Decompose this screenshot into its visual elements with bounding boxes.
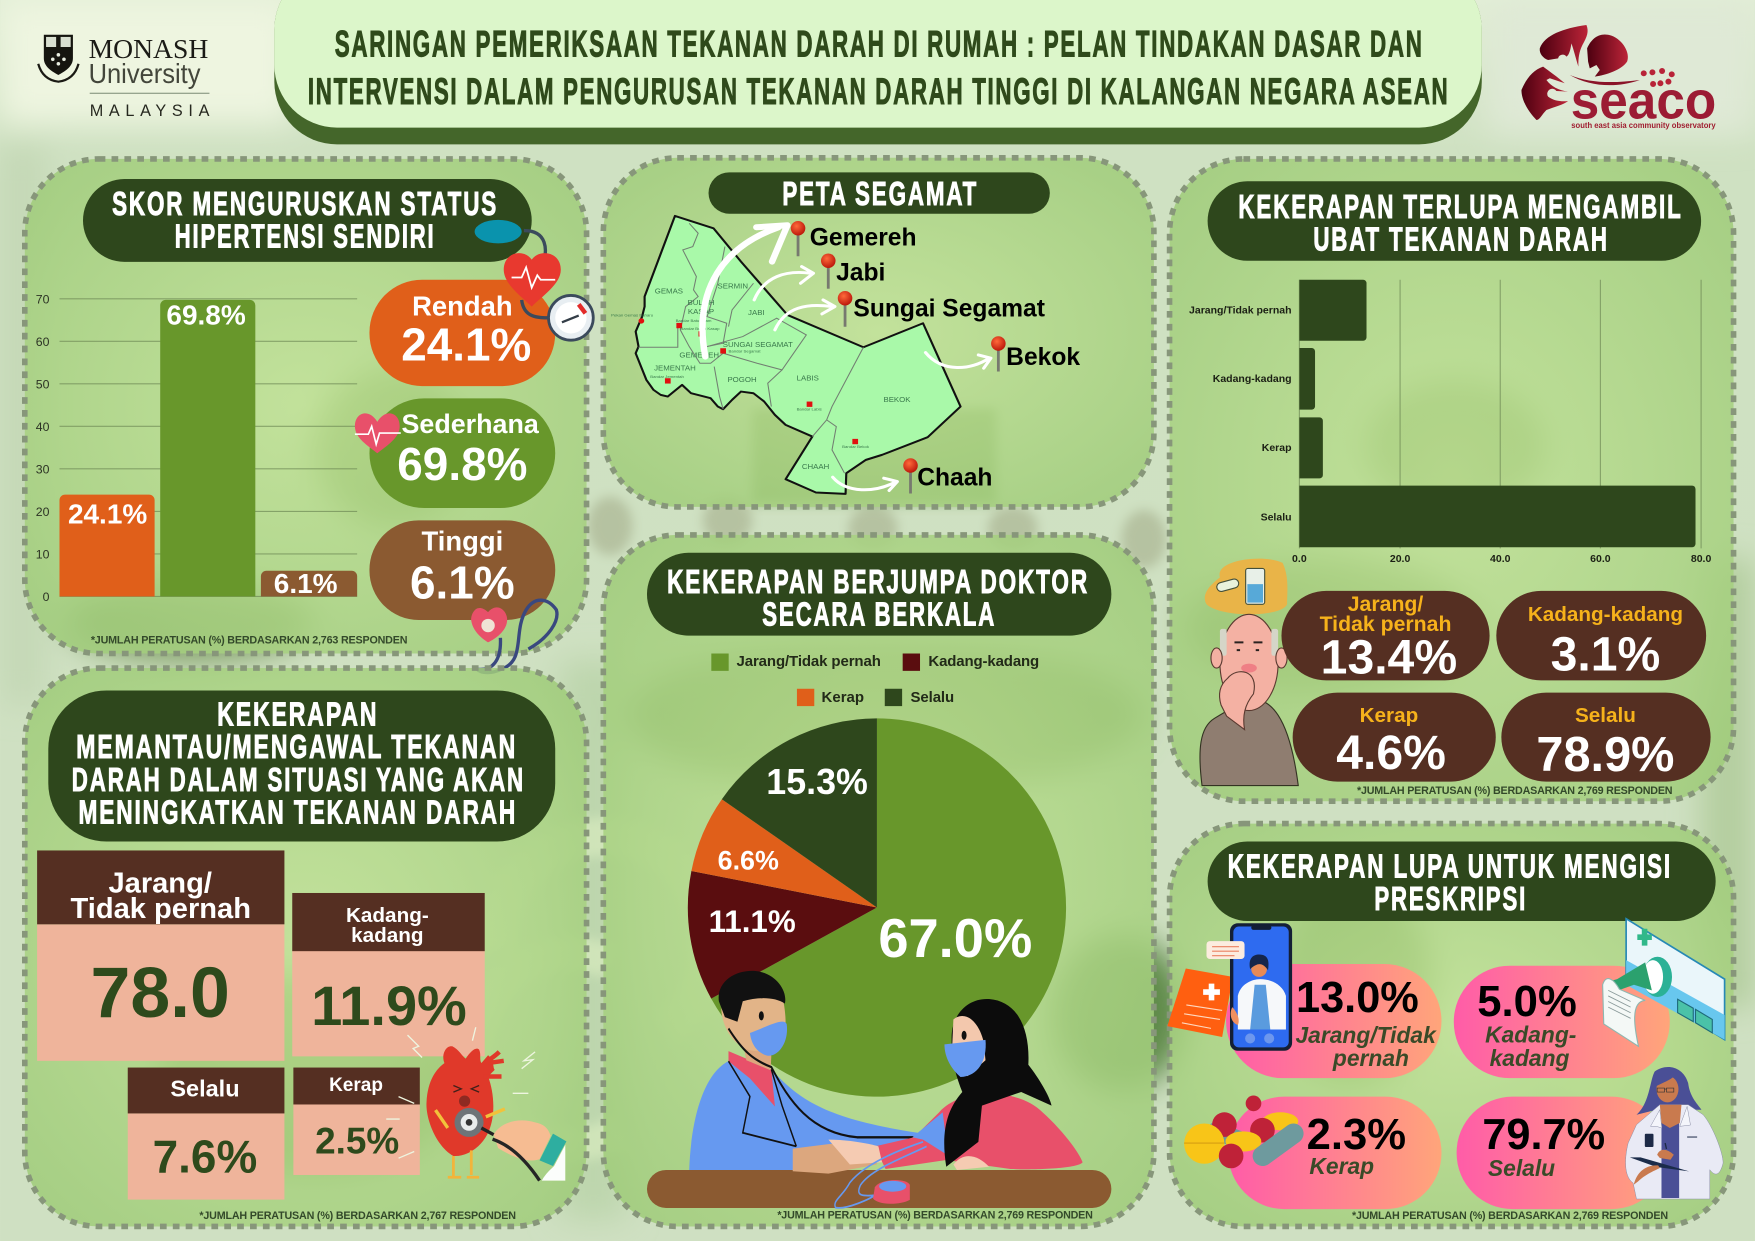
bar chart: forgetting medicine: Kadang-kadang xyxy=(1213,373,1292,385)
stat: rendah: 24.1% xyxy=(401,318,531,370)
icon: prescription sheet xyxy=(1167,969,1233,1037)
bar chart: forgetting medicine: 0.0 xyxy=(1292,553,1307,565)
map of segamat: JEMENTAH xyxy=(654,364,696,372)
map of segamat: CHAAH xyxy=(802,462,829,471)
illustration: doctor and patient xyxy=(689,971,1083,1208)
stat: selalu xyxy=(1457,1097,1668,1209)
map of segamat xyxy=(611,216,961,494)
pin: gemereh xyxy=(791,221,917,256)
stat: jarang/tidak pernah: Jarang/ xyxy=(1348,592,1423,616)
bar chart: forgetting medicine xyxy=(1189,280,1711,565)
stat: kadang-kadang: kadang xyxy=(1490,1045,1570,1071)
pin: jabi xyxy=(821,253,885,289)
seaco logo xyxy=(1521,25,1716,130)
arrows from map to pins xyxy=(703,225,991,491)
icon: prescription machine xyxy=(1603,919,1725,1046)
stat: jarang / tidak pernah: Tidak pernah xyxy=(71,893,251,925)
stat: selalu: 79.7% xyxy=(1482,1111,1605,1159)
stat: sederhana xyxy=(369,398,555,508)
monash university malaysia logo: MONASH xyxy=(89,34,208,65)
bar chart: forgetting medicine: 80.0 xyxy=(1691,553,1711,565)
heading: KEKERAPAN BERJUMPA DOKTOR xyxy=(667,564,1089,601)
heading xyxy=(1208,181,1701,261)
footnote: *JUMLAH PERATUSAN (%) BERDASARKAN 2,767 RESPONDEN xyxy=(199,1210,516,1222)
pie chart: 11.1% xyxy=(709,904,796,939)
stat: selalu xyxy=(1501,693,1711,782)
heading: SECARA BERKALA xyxy=(762,597,996,634)
stat: kerap xyxy=(1228,1097,1441,1209)
panel: peta segamat xyxy=(603,158,1154,507)
map of segamat: JABI xyxy=(748,308,765,317)
map of segamat: LABIS xyxy=(797,374,819,382)
stat: tinggi: 6.1% xyxy=(410,557,515,609)
pin: bekok: Bekok xyxy=(1006,344,1080,371)
pin: gemereh: Gemereh xyxy=(810,225,917,252)
stat: kerap: Kerap xyxy=(329,1075,383,1096)
bar chart: status scores xyxy=(36,292,357,604)
pin: sungai segamat: Sungai Segamat xyxy=(853,296,1045,323)
illustration: forgetful man xyxy=(1200,559,1298,786)
bar chart: status scores: 70 xyxy=(36,292,50,306)
legend: Kerap xyxy=(822,689,864,706)
heading: UBAT TEKANAN DARAH xyxy=(1313,222,1609,259)
heading: MENINGKATKAN TEKANAN DARAH xyxy=(79,795,517,832)
map of segamat: SUNGAI SEGAMAT xyxy=(723,340,793,349)
map of segamat: SERMIN xyxy=(718,282,748,291)
stat: jarang / tidak pernah xyxy=(37,850,284,1061)
seaco logo: seaco xyxy=(1571,71,1716,130)
heading: DARAH DALAM SITUASI YANG AKAN xyxy=(72,762,525,799)
heading: KEKERAPAN xyxy=(217,697,378,734)
bar chart: forgetting medicine: Jarang/Tidak pernah xyxy=(1189,304,1292,316)
panel: kekerapan terlupa mengambil ubat xyxy=(1170,159,1734,801)
footnote: *JUMLAH PERATUSAN (%) BERDASARKAN 2,763 RESPONDEN xyxy=(91,634,408,646)
thought bubble xyxy=(1205,559,1287,614)
stat: kadang-kadang xyxy=(1454,966,1670,1078)
pin: sungai segamat xyxy=(838,291,1045,327)
stat: jarang/tidak pernah xyxy=(1226,964,1441,1078)
table xyxy=(647,1170,1111,1208)
stat: kerap: 2.5% xyxy=(315,1121,399,1162)
bar chart: status scores: 24.1% xyxy=(68,499,147,530)
stat: kadang-kadang: 11.9% xyxy=(311,974,467,1037)
stat: selalu: 78.9% xyxy=(1536,728,1674,782)
pie chart xyxy=(688,718,1066,1097)
stat: selalu: 7.6% xyxy=(153,1131,257,1183)
map of segamat: Bandar Buloh Kasap xyxy=(680,326,720,331)
stat: jarang/tidak pernah: Tidak pernah xyxy=(1320,612,1451,636)
icon: pharmacist xyxy=(1626,1067,1723,1199)
stat: jarang / tidak pernah: Jarang/ xyxy=(108,867,212,899)
stat: kerap: Kerap xyxy=(1360,704,1418,727)
stat: selalu: Selalu xyxy=(1488,1155,1555,1181)
icon: sederhana heart xyxy=(355,413,401,453)
bar chart: status scores: 30 xyxy=(36,462,50,476)
seaco logo: south east asia community observatory xyxy=(1571,121,1716,130)
map of segamat: GEMEREH xyxy=(679,351,719,359)
pie chart: 15.3% xyxy=(766,762,868,802)
bar chart: status scores: 20 xyxy=(36,505,50,519)
map of segamat: Bandar Bekok xyxy=(842,444,870,449)
heading xyxy=(83,179,532,262)
legend: Selalu xyxy=(911,689,954,706)
map of segamat: BULOH xyxy=(688,298,714,307)
map of segamat: KASAP xyxy=(688,307,714,316)
stat: jarang/tidak pernah xyxy=(1281,591,1490,685)
legend: Kadang-kadang xyxy=(928,653,1039,670)
icon: seaco flower xyxy=(1521,25,1675,120)
panel: kekerapan lupa mengisi preskripsi xyxy=(1167,824,1734,1226)
stat: kadang-kadang: 3.1% xyxy=(1551,627,1660,681)
stat: kerap xyxy=(293,1068,420,1175)
heading: MEMANTAU/MENGAWAL TEKANAN xyxy=(76,729,517,766)
bar chart: status scores: 69.8% xyxy=(166,300,246,331)
heading: HIPERTENSI SENDIRI xyxy=(175,218,435,255)
stat: kerap xyxy=(1293,693,1496,782)
panel: kekerapan memantau xyxy=(25,668,587,1226)
icon: heart with stethoscope xyxy=(386,1027,566,1181)
stat: kerap: 2.3% xyxy=(1307,1110,1406,1159)
map of segamat: Pekan Gemas Baharu xyxy=(611,313,654,318)
map of segamat: BEKOK xyxy=(883,395,910,404)
doctor xyxy=(689,971,923,1174)
stat: selalu xyxy=(128,1068,284,1200)
map of segamat: Bandar Labis xyxy=(797,407,822,412)
map of segamat: Bandar Batu Anam xyxy=(676,318,712,323)
bar chart: forgetting medicine: Selalu xyxy=(1261,511,1292,523)
stat: kadang-kadang: Kadang-kadang xyxy=(1528,603,1683,626)
pin: bekok xyxy=(991,336,1080,372)
stat: kadang-kadang xyxy=(292,893,485,1056)
monash university malaysia logo xyxy=(38,34,210,120)
bar chart: status scores: 60 xyxy=(36,335,50,349)
stat: tinggi: Tinggi xyxy=(421,526,503,557)
icon: monash crest xyxy=(38,35,79,82)
patient xyxy=(828,999,1083,1170)
stat: jarang/tidak pernah: Jarang/Tidak xyxy=(1295,1022,1437,1048)
bar chart: forgetting medicine: 60.0 xyxy=(1590,553,1611,565)
stat: kadang-kadang xyxy=(1496,591,1706,681)
stat: kadang-kadang: kadang xyxy=(351,924,424,947)
stat: selalu: Selalu xyxy=(1575,704,1636,727)
legend: Jarang/Tidak pernah xyxy=(737,653,881,670)
stat: kadang-kadang: Kadang- xyxy=(346,904,429,927)
legend xyxy=(711,653,1039,706)
bar chart: forgetting medicine: Kerap xyxy=(1262,442,1292,454)
stat: kerap: Kerap xyxy=(1309,1153,1374,1179)
bar chart: forgetting medicine: 20.0 xyxy=(1390,553,1410,565)
stat: rendah: Rendah xyxy=(412,291,513,322)
bar chart: status scores: 10 xyxy=(36,547,50,561)
bar chart: status scores: 50 xyxy=(36,377,50,391)
stat: jarang/tidak pernah: 13.0% xyxy=(1296,974,1419,1022)
monash university malaysia logo: University xyxy=(89,58,200,89)
map of segamat: GEMAS xyxy=(655,287,683,296)
heading: SKOR MENGURUSKAN STATUS xyxy=(112,186,498,223)
heading: PETA SEGAMAT xyxy=(782,176,978,213)
icon: blood pressure monitor xyxy=(475,220,593,340)
bar chart: status scores: 0 xyxy=(43,590,50,604)
panel: kekerapan berjumpa doktor xyxy=(603,535,1154,1226)
pin: jabi: Jabi xyxy=(836,259,885,286)
bar chart: status scores: 40 xyxy=(36,420,50,434)
map of segamat: POGOH xyxy=(727,375,757,384)
bar chart: status scores: 6.1% xyxy=(274,568,338,599)
stat: kerap: 4.6% xyxy=(1336,726,1446,780)
heading xyxy=(48,690,555,842)
stat: sederhana: 69.8% xyxy=(397,438,527,490)
monash university malaysia logo: MALAYSIA xyxy=(90,102,210,120)
map of segamat: Bandar Segamat xyxy=(729,349,761,354)
title banner xyxy=(274,0,1482,144)
pin: chaah xyxy=(903,458,992,493)
footnote: *JUMLAH PERATUSAN (%) BERDASARKAN 2,769 RESPONDEN xyxy=(1357,785,1673,797)
icon: pills xyxy=(1184,1096,1308,1170)
heading xyxy=(1208,842,1716,921)
blood pressure gauge xyxy=(835,1142,927,1208)
pin: chaah: Chaah xyxy=(917,465,992,492)
stat: tinggi xyxy=(369,520,555,620)
stat: jarang/tidak pernah: pernah xyxy=(1332,1045,1409,1071)
icon: doctor on phone xyxy=(1206,923,1292,1051)
heading: PRESKRIPSI xyxy=(1374,881,1527,918)
pie chart: 6.6% xyxy=(718,845,779,875)
stat: selalu: Selalu xyxy=(170,1076,240,1102)
stat: jarang / tidak pernah: 78.0 xyxy=(91,953,230,1033)
stat: jarang/tidak pernah: 13.4% xyxy=(1321,631,1457,685)
icon: stethoscope xyxy=(471,600,557,673)
stat: kadang-kadang: 5.0% xyxy=(1477,977,1577,1026)
footnote: *JUMLAH PERATUSAN (%) BERDASARKAN 2,769 RESPONDEN xyxy=(1352,1210,1668,1222)
stat: kadang-kadang: Kadang- xyxy=(1485,1021,1576,1047)
pie chart: 67.0% xyxy=(878,908,1032,969)
heading xyxy=(709,172,1050,214)
heading xyxy=(647,553,1111,636)
stat: rendah xyxy=(369,280,555,386)
footnote: *JUMLAH PERATUSAN (%) BERDASARKAN 2,769 RESPONDEN xyxy=(777,1210,1093,1222)
panel: skor menguruskan status xyxy=(25,159,593,673)
map of segamat: Bandar Jementah xyxy=(650,374,685,379)
stat: sederhana: Sederhana xyxy=(402,409,540,439)
bar chart: forgetting medicine: 40.0 xyxy=(1490,553,1511,565)
